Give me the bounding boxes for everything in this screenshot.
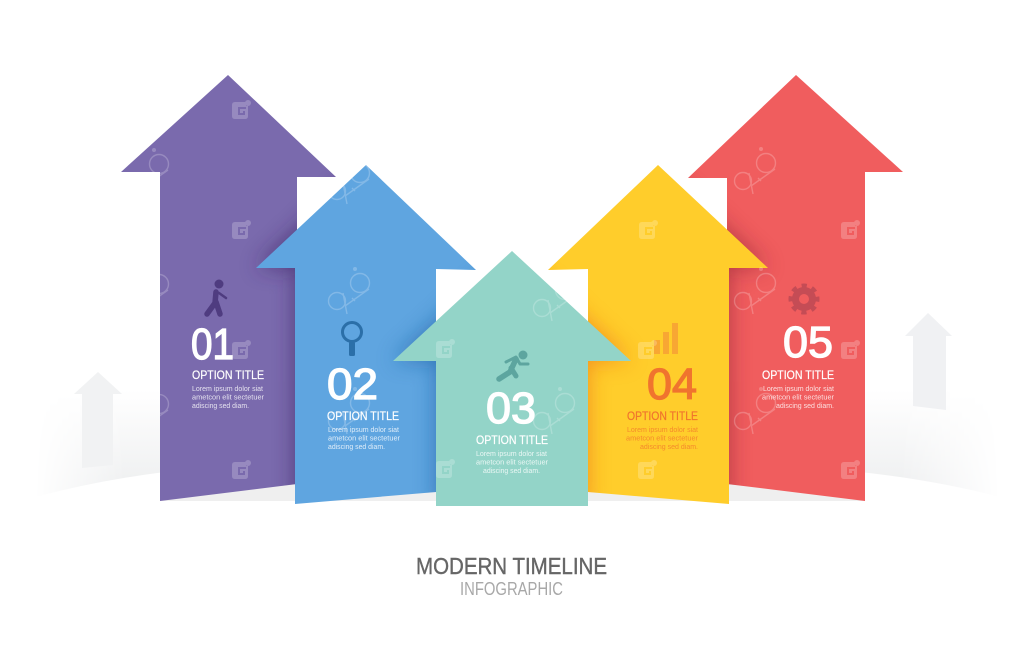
- icon: gear: [790, 286, 818, 312]
- text block 5: [762, 384, 835, 410]
- text block 5: adiscing sed diam.: [776, 401, 834, 410]
- heading: option title 5: OPTION TITLE: [762, 370, 834, 382]
- text block 2: [328, 425, 400, 451]
- text block 2: adiscing sed diam.: [328, 442, 385, 451]
- ground: floor band: [160, 480, 865, 501]
- number 01: 01: [191, 320, 234, 369]
- watermark marks: [128, 100, 860, 479]
- small arrow: left background: [74, 372, 122, 468]
- text block 4: Lorem ipsum dolor siat: [627, 425, 699, 434]
- panel: step 03 teal arrow: [393, 251, 631, 506]
- panel: step 01 purple arrow: [121, 75, 336, 501]
- number 04: 04: [647, 360, 697, 409]
- text block 1: adiscing sed diam.: [192, 401, 249, 410]
- icon: walking person: [207, 280, 226, 314]
- text block 3: ametcon elit sectetuer: [476, 458, 548, 466]
- icon: bar chart: [654, 323, 678, 354]
- heading: option title 2: OPTION TITLE: [327, 411, 399, 423]
- text block 5: ametcon elit sectetuer: [762, 392, 834, 402]
- text block 4: adiscing sed diam.: [640, 442, 698, 451]
- text block 4: ametcon elit sectetuer: [626, 434, 698, 442]
- text block 3: adiscing sed diam.: [483, 466, 540, 475]
- text block 2: ametcon elit sectetuer: [328, 434, 400, 442]
- number 02: 02: [327, 360, 378, 409]
- heading: option title 4: OPTION TITLE: [627, 411, 698, 423]
- text block 5: Lorem ipsum dolor siat: [763, 384, 835, 393]
- text block 1: ametcon elit sectetuer: [192, 392, 264, 402]
- heading: option title 3: OPTION TITLE: [476, 435, 548, 447]
- text block 3: [476, 449, 548, 475]
- icon: running person: [499, 350, 528, 379]
- ground: left hill: [80, 437, 160, 486]
- small arrow: right background: [905, 313, 952, 410]
- icon: magnifier: [342, 322, 362, 356]
- text block 1: Lorem ipsum dolor siat: [192, 384, 264, 393]
- number 05: 05: [783, 318, 833, 367]
- number 03: 03: [486, 384, 536, 433]
- text block 4: [626, 425, 699, 451]
- title: MODERN TIMELINE: [416, 553, 607, 579]
- panel: step 05 red arrow: [688, 75, 903, 501]
- heading: option title 1: OPTION TITLE: [192, 370, 264, 382]
- panel: step 04 yellow arrow: [548, 165, 768, 504]
- ground: right hill: [865, 437, 948, 485]
- panel: step 02 blue arrow: [256, 165, 476, 504]
- text block 1: [192, 384, 264, 410]
- subtitle: INFOGRAPHIC: [460, 579, 563, 599]
- text block 2: Lorem ipsum dolor siat: [328, 425, 400, 434]
- text block 3: Lorem ipsum dolor siat: [476, 449, 548, 458]
